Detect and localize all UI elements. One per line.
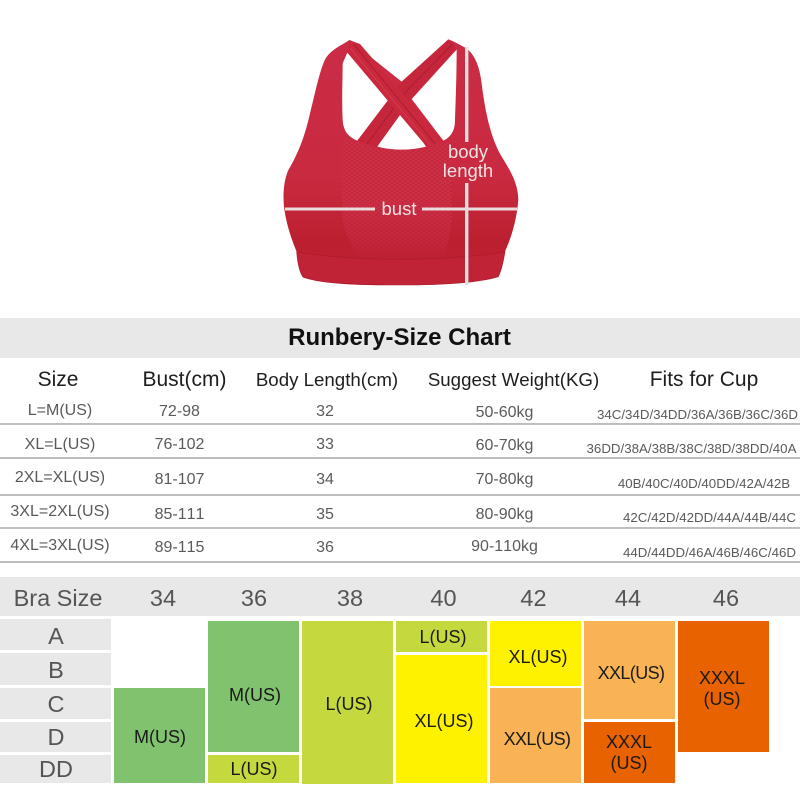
cup row labels bbox=[0, 619, 111, 783]
band 44 column: XXXL bbox=[606, 732, 652, 752]
bra size header bar: Bra Size bbox=[14, 585, 102, 611]
size table rows: 85-111 bbox=[155, 506, 205, 523]
band 38 column bbox=[302, 621, 393, 784]
size table rows: 2XL=XL(US) bbox=[15, 469, 105, 486]
band 46 column bbox=[678, 621, 769, 752]
bra size header bar: 40 bbox=[430, 585, 457, 611]
size table header: Size bbox=[38, 368, 78, 391]
band 42 column: XXL(US) bbox=[504, 729, 570, 749]
size table rows: 76-102 bbox=[155, 436, 205, 453]
mesh panel bbox=[342, 136, 452, 260]
size table rows: 60-70kg bbox=[476, 437, 533, 454]
band 46 column: XXXL bbox=[699, 668, 745, 688]
size table rows: 70-80kg bbox=[476, 471, 533, 488]
size table header: Bust(cm) bbox=[142, 368, 226, 391]
size table rows: 44D/44DD/46A/46B/46C/46D bbox=[623, 545, 796, 560]
bra size header bar: 34 bbox=[150, 585, 176, 611]
band 46 column: (US) bbox=[704, 689, 740, 709]
band 40 column bbox=[396, 621, 487, 783]
bra size header bar: 42 bbox=[520, 585, 547, 611]
size table rows: 34 bbox=[316, 471, 334, 488]
size table rows: 40B/40C/40D/40DD/42A/42B bbox=[618, 476, 790, 491]
size table rows: 32 bbox=[316, 403, 334, 420]
band 42 column: XL(US) bbox=[508, 647, 568, 667]
size table rows: 35 bbox=[316, 506, 334, 523]
cup row labels: DD bbox=[39, 756, 73, 782]
measurement lines and labels bbox=[285, 47, 517, 285]
size table rows: 36 bbox=[316, 539, 334, 556]
band 44 column bbox=[584, 621, 675, 783]
band 44 column: (US) bbox=[610, 753, 648, 773]
cup row labels: A bbox=[48, 623, 64, 649]
size table rows: 80-90kg bbox=[476, 506, 533, 523]
band 44 column: XXL(US) bbox=[598, 663, 664, 683]
band 42 column bbox=[490, 621, 581, 783]
size table header: Body Length(cm) bbox=[256, 369, 398, 390]
size table rows: L=M(US) bbox=[28, 402, 92, 419]
bra size header bar: 44 bbox=[615, 585, 641, 611]
band 38 column: L(US) bbox=[325, 694, 373, 714]
band 40 column: L(US) bbox=[419, 627, 467, 647]
size table rows: 89-115 bbox=[155, 539, 205, 556]
size table rows: 81-107 bbox=[155, 471, 205, 488]
under band bbox=[297, 252, 505, 285]
band 40 column: XL(US) bbox=[414, 711, 474, 731]
size table rows bbox=[0, 402, 800, 563]
measurement lines and labels: body bbox=[448, 141, 489, 162]
size table rows: 50-60kg bbox=[476, 404, 533, 421]
cup row labels: D bbox=[48, 724, 64, 750]
band 34 column: M(US) bbox=[134, 727, 186, 747]
measurement lines and labels: bust bbox=[382, 198, 416, 219]
size table header: Fits for Cup bbox=[650, 368, 758, 391]
size table rows: 72-98 bbox=[159, 403, 200, 420]
size table rows: 42C/42D/42DD/44A/44B/44C bbox=[623, 510, 796, 525]
cup row labels: B bbox=[48, 657, 64, 683]
band 36 column: L(US) bbox=[230, 759, 278, 779]
size table rows: 4XL=3XL(US) bbox=[10, 537, 110, 554]
band 36 column bbox=[208, 621, 299, 783]
armhole and neckline cutouts bbox=[342, 49, 457, 150]
bra size header bar: 38 bbox=[337, 585, 363, 611]
crossed straps bbox=[347, 39, 457, 147]
mesh shading bbox=[342, 136, 452, 260]
measurement lines and labels: length bbox=[443, 160, 493, 181]
size table rows: 36DD/38A/38B/38C/38D/38DD/40A bbox=[587, 441, 797, 456]
band 36 column: M(US) bbox=[229, 685, 281, 705]
size table rows: 34C/34D/34DD/36A/36B/36C/36D bbox=[597, 407, 798, 422]
size table rows: 3XL=2XL(US) bbox=[10, 503, 110, 520]
title bar bbox=[0, 318, 800, 358]
title bar: Runbery-Size Chart bbox=[288, 324, 511, 351]
size table rows: 33 bbox=[316, 436, 334, 453]
size table header: Suggest Weight(KG) bbox=[428, 369, 599, 390]
band 34 column bbox=[114, 688, 205, 783]
cup row labels: C bbox=[48, 691, 65, 717]
product photo: red sports bra bbox=[284, 39, 518, 285]
size table rows: 90-110kg bbox=[471, 538, 538, 555]
size table rows: XL=L(US) bbox=[25, 436, 95, 453]
bra body bbox=[284, 39, 518, 285]
size table header bbox=[38, 368, 758, 391]
bra size header bar bbox=[0, 577, 800, 616]
bra size header bar: 46 bbox=[713, 585, 739, 611]
bra size header bar: 36 bbox=[241, 585, 267, 611]
